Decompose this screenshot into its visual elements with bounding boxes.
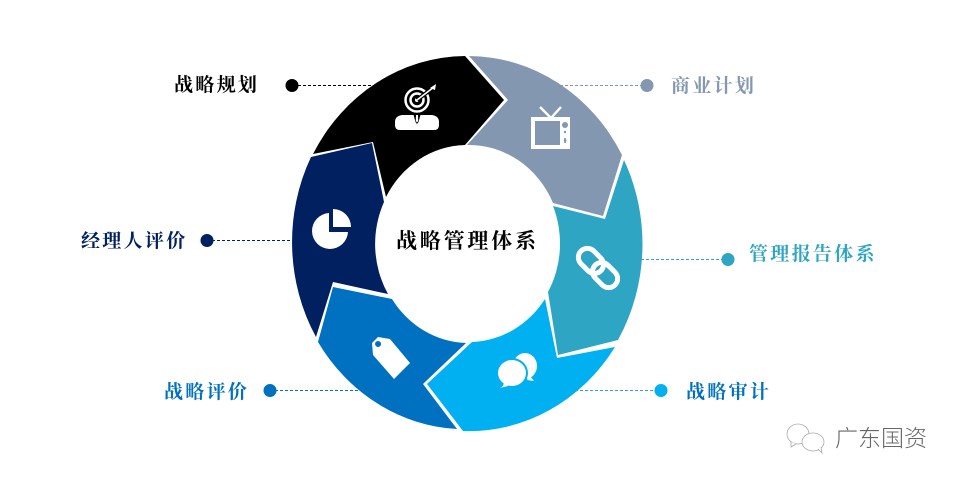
label: strategic audit — [575, 381, 771, 403]
label: strategic planning: 战略规划 — [174, 74, 259, 96]
watermark: account name: 广东国资 — [835, 425, 927, 451]
icon: television — [531, 107, 570, 149]
icon: pie chart — [312, 209, 351, 249]
segment: business plan — [467, 56, 622, 216]
icon: price tag — [372, 337, 410, 379]
label: business plan — [560, 75, 756, 97]
segment: management reporting — [548, 160, 642, 355]
cycle diagram — [292, 56, 642, 431]
label: strategic planning — [174, 74, 374, 96]
label: strategic audit: 战略审计 — [686, 381, 771, 403]
segment: strategic planning — [313, 56, 504, 197]
center title: 战略管理体系 — [396, 229, 539, 253]
label: strategic evaluation: 战略评价 — [164, 381, 249, 403]
label: management reporting system: 管理报告体系 — [749, 242, 877, 265]
icon: chain link — [575, 245, 621, 291]
label: management reporting system — [641, 242, 877, 266]
label: manager evaluation: 经理人评价 — [81, 230, 188, 252]
icon: speech bubbles — [496, 353, 537, 388]
icon: target and person — [395, 84, 439, 130]
segment: manager evaluation — [292, 143, 388, 337]
label: manager evaluation — [81, 230, 292, 252]
label: business plan: 商业计划 — [671, 75, 756, 97]
watermark: WeChat logo — [787, 424, 824, 453]
segment: strategic audit — [427, 299, 615, 431]
label: strategic evaluation — [164, 381, 358, 403]
segment: strategic evaluation — [318, 287, 466, 429]
